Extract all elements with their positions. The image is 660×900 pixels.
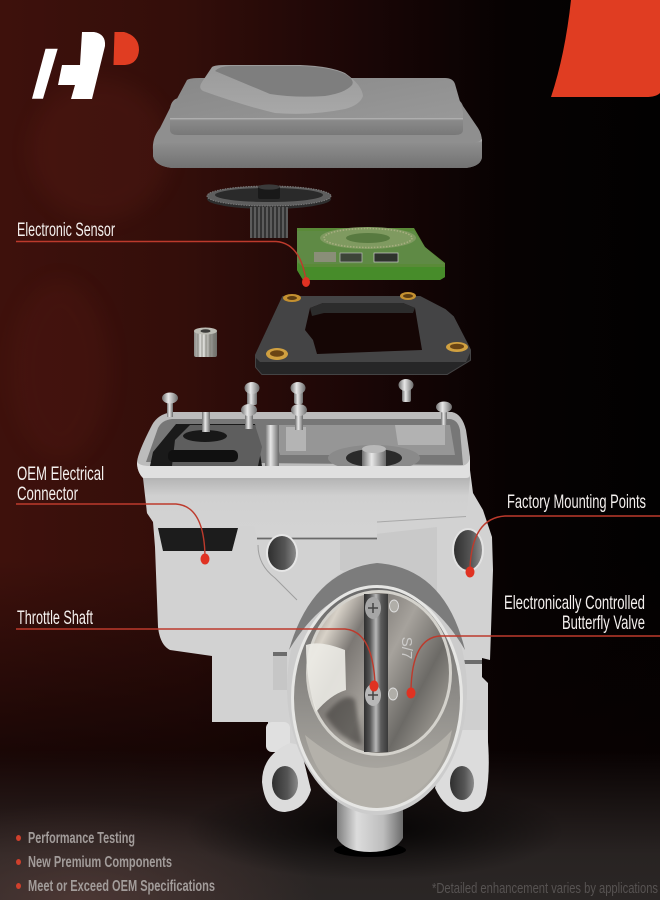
cover flange bbox=[153, 98, 482, 168]
feature list: Meet or Exceed OEM Specifications bbox=[28, 878, 215, 895]
callout: electronic sensor: Electronic Sensor bbox=[17, 220, 115, 241]
cover raised bump bbox=[200, 65, 363, 114]
callout: butterfly valve bbox=[406, 593, 660, 698]
tube behind left ear bbox=[266, 722, 290, 752]
small pinion bbox=[194, 328, 217, 357]
shaft screws bbox=[365, 597, 381, 706]
front panel bbox=[143, 478, 470, 538]
disc highlight bbox=[306, 643, 346, 712]
callout: OEM electrical connector: Connector bbox=[17, 484, 78, 505]
lower right ear bbox=[435, 730, 489, 812]
lower left ear bbox=[262, 743, 311, 812]
callout: throttle shaft bbox=[16, 608, 378, 692]
callout: OEM electrical connector: OEM Electrical bbox=[17, 464, 104, 485]
bottom cylinder bbox=[334, 843, 406, 857]
dark mounting plate with brass inserts bbox=[256, 292, 470, 374]
screws bbox=[162, 379, 452, 430]
callout: factory mounting points bbox=[466, 492, 660, 578]
body interior bbox=[146, 419, 463, 465]
valve outer ring bbox=[285, 561, 469, 817]
logo bbox=[32, 32, 139, 99]
callout: OEM electrical connector bbox=[16, 464, 210, 564]
throttle body casting bbox=[137, 412, 493, 857]
callout: throttle shaft: Throttle Shaft bbox=[17, 608, 93, 629]
body rim top bbox=[137, 412, 470, 478]
disc engraved marks: S/7 bbox=[398, 637, 415, 659]
upper chamfer bbox=[289, 563, 465, 650]
right mounting hole bbox=[452, 528, 484, 572]
upper mounting hole bbox=[266, 534, 298, 572]
feature list: Performance Testing bbox=[28, 830, 135, 847]
right lower column bbox=[440, 700, 488, 790]
callout: electronic sensor bbox=[16, 220, 310, 287]
cover bbox=[153, 65, 482, 168]
rim front face bbox=[137, 458, 470, 478]
butterfly disc bbox=[306, 590, 452, 756]
throttle shaft bbox=[364, 594, 388, 752]
valve bore bbox=[291, 585, 463, 811]
red corner shape bbox=[551, 0, 660, 97]
connector slot bbox=[158, 528, 238, 551]
gear bbox=[207, 184, 331, 238]
seam and boss shading bbox=[258, 527, 482, 690]
cover upper plate bbox=[170, 78, 463, 135]
sensor circuit board bbox=[297, 227, 445, 280]
feature list: New Premium Components bbox=[28, 854, 172, 871]
bore lower sheen bbox=[305, 730, 452, 808]
disc engraved marks bbox=[388, 600, 415, 700]
feature list bbox=[16, 830, 215, 895]
main silhouette bbox=[145, 470, 493, 745]
